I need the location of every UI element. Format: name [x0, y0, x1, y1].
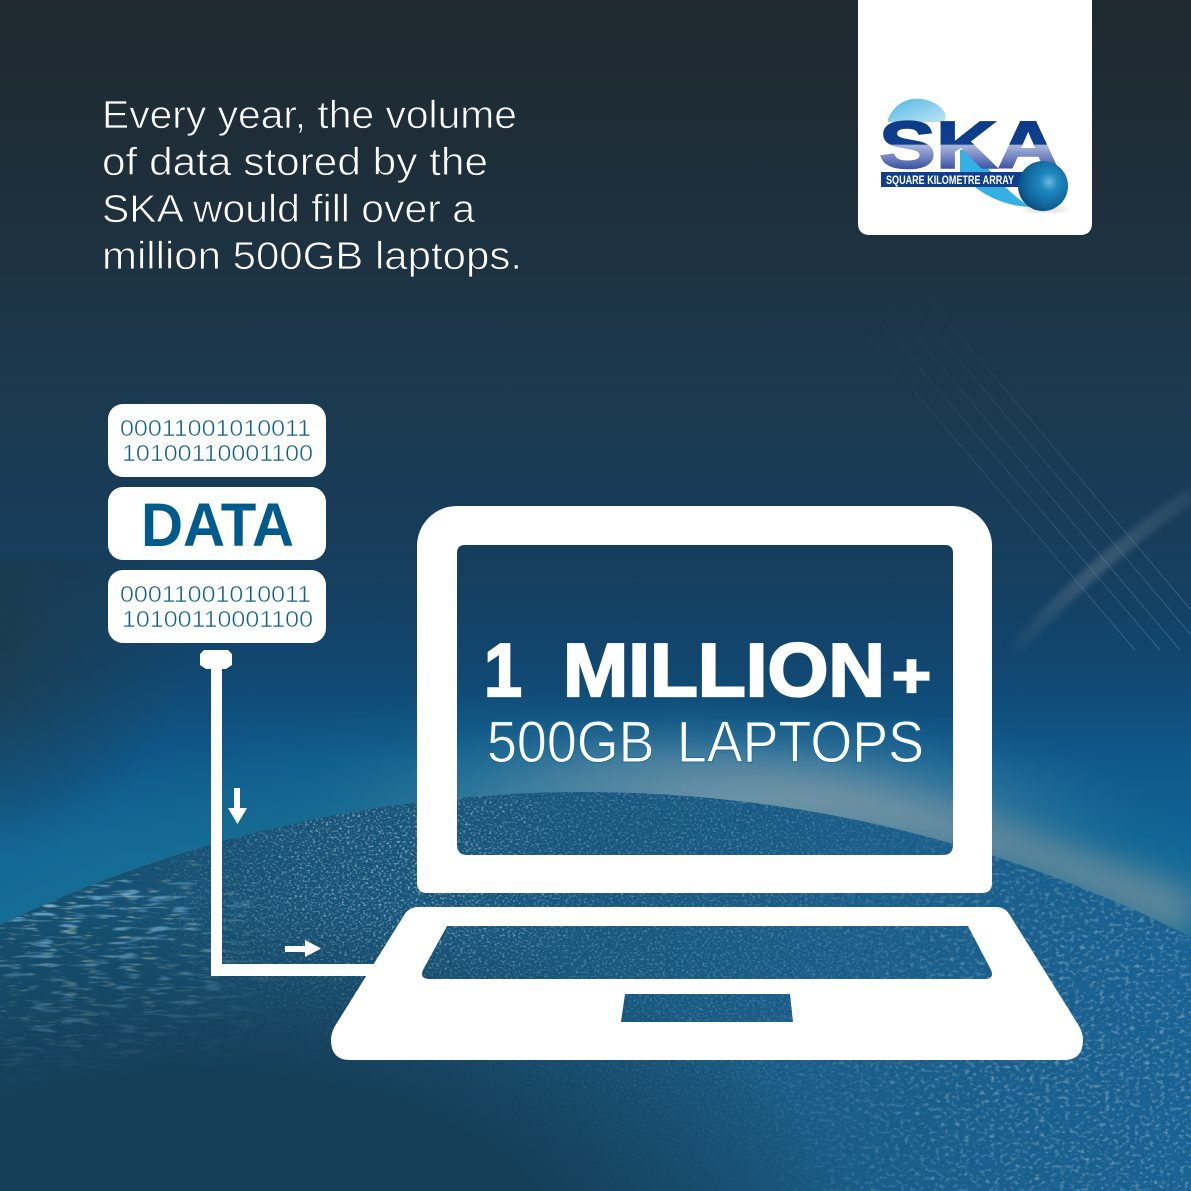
screen text: 1 MILLION+: MILLION [563, 628, 885, 712]
arrow: down [228, 788, 247, 824]
laptop screen [417, 506, 992, 893]
data block: binary bottom: 10100110001100 [122, 606, 313, 632]
screen text: 1 MILLION+: 1 [484, 628, 522, 712]
headline text: SKA would fill over a [102, 188, 476, 231]
data block: binary top: 10100110001100 [122, 440, 313, 466]
logo: SKA letters: SKA [879, 108, 1059, 183]
data block: DATA label: DATA [141, 491, 294, 559]
cable connecting data to laptop [200, 650, 380, 976]
logo: upper swoosh [888, 99, 946, 122]
data block: binary bottom: 00011001010011 [120, 581, 311, 607]
headline text: of data stored by the [102, 141, 488, 184]
data block: binary top [108, 404, 326, 477]
arrow: right [285, 940, 321, 957]
data stack [108, 404, 326, 643]
screen text: 1 MILLION+ [484, 628, 931, 712]
data block: binary top: 00011001010011 [120, 415, 311, 441]
screen text: 500GB LAPTOPS: 500GB LAPTOPS [487, 710, 924, 775]
logo: lower swoosh [960, 150, 1030, 207]
data block: DATA label [108, 487, 326, 560]
logo: tagline bar: SQUARE KILOMETRE ARRAY [886, 173, 1014, 187]
headline text: million 500GB laptops. [102, 235, 522, 278]
logo: sphere [1018, 161, 1068, 212]
screen text: 1 MILLION+: + [892, 642, 931, 711]
headline text: Every year, the volume [102, 94, 517, 137]
laptop base [331, 907, 1083, 1060]
background: planet earth [0, 780, 1191, 1191]
logo card: SKA [858, 0, 1092, 235]
headline text [102, 94, 522, 278]
laptop icon [331, 506, 1083, 1060]
data block: binary bottom [108, 570, 326, 643]
